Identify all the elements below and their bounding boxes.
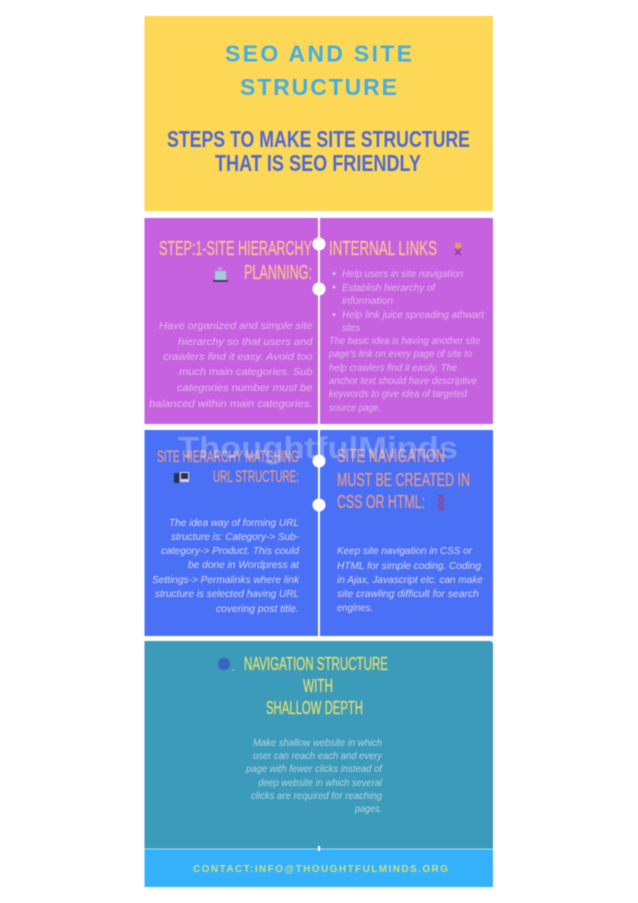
body text: crawlers find it easy. Avoid too [163,351,313,363]
body text: pages. [354,803,382,815]
bullet list: Help users in site navigation [342,268,463,280]
body text: deep website in which several [258,777,383,789]
timeline connector [312,238,326,512]
body text: structure is: Category-> Sub- [171,531,299,543]
body text [149,320,314,410]
heading: SHALLOW DEPTH [266,698,363,718]
panel: url structure [144,430,318,636]
icon: blue circle [218,658,234,671]
heading: URL STRUCTURE: [213,468,299,486]
body text: in Ajax, Javascript etc. can make [337,574,483,586]
watermark: ThoughtfulMinds [178,430,458,465]
title: SEO AND SITE [225,40,412,66]
body text: user can reach each and every [253,750,383,762]
body text: help crawlers find it easily. The [329,362,457,374]
icon: ribbon [438,495,444,510]
body text: hierarchy so that users and [178,336,314,348]
subtitle [167,126,470,176]
icon: building [213,267,228,282]
panel: internal links [320,218,493,424]
body text: Settings-> Permalinks where link [152,574,300,586]
heading: PLANNING: [244,262,312,284]
heading: SITE NAVIGATION [337,446,445,466]
body text: Keep site navigation in CSS or [337,545,472,557]
body text [245,737,383,815]
title [225,40,412,100]
body text [328,335,480,414]
panel: site navigation [320,430,493,636]
bullet list: Help link juice spreading athwart [342,309,485,321]
body text [152,517,300,615]
body text: site crawling difficult for search [337,588,479,600]
panel: shallow depth navigation [144,641,493,849]
body text: balanced within main categories. [149,398,312,410]
body text: anchor text should have descriptive [329,375,477,387]
body text: covering post title. [216,603,299,615]
icon: chair [455,243,461,255]
heading [244,654,388,718]
body text: Make shallow website in which [253,737,382,749]
heading: STEP:1-SITE HIERARCHY [159,238,312,260]
body text: page's link on every page of site to [328,348,472,360]
body text: category-> Product. This could [161,545,300,557]
panel: header [144,16,493,211]
body text: source page. [329,402,381,414]
body text: The basic idea is having another site [329,335,480,347]
heading: NAVIGATION STRUCTURE [244,654,388,674]
heading: CSS OR HTML: [337,492,425,512]
title: STRUCTURE [240,74,397,100]
subtitle: STEPS TO MAKE SITE STRUCTURE [167,126,470,152]
bullet list: sites [342,322,361,334]
body text: The idea way of forming URL [169,517,299,529]
heading [157,448,299,486]
body text: Have organized and simple site [159,320,313,332]
body text: clicks are required for reaching [251,790,382,802]
body text: much main categories. Sub [179,366,313,378]
body text: categories number must be [177,382,313,394]
body text: be done in Wordpress at [188,559,300,571]
contact text: CONTACT:INFO@THOUGHTFULMINDS.ORG [193,864,448,875]
body text: page with fewer clicks instead of [245,763,383,775]
heading [337,446,470,512]
panel: contact footer [144,846,493,887]
panel: site hierarchy planning [144,218,318,424]
bullet list: Establish hierarchy of [342,282,436,294]
heading: WITH [303,676,333,696]
body text: engines. [337,602,373,614]
subtitle: THAT IS SEO FRIENDLY [215,150,421,176]
heading: SITE HIERARCHY MATCHING [157,448,299,466]
body text [337,545,483,614]
body text: keywords to give idea of targeted [329,388,468,400]
body text: structure is selected having URL [155,588,299,600]
bullet list [332,268,485,334]
body text: HTML for simple coding. Coding [337,560,481,572]
heading: INTERNAL LINKS [329,238,437,260]
heading: MUST BE CREATED IN [337,470,470,490]
icon: monitor [174,472,189,483]
heading [159,238,312,284]
bullet list: information [342,295,393,307]
